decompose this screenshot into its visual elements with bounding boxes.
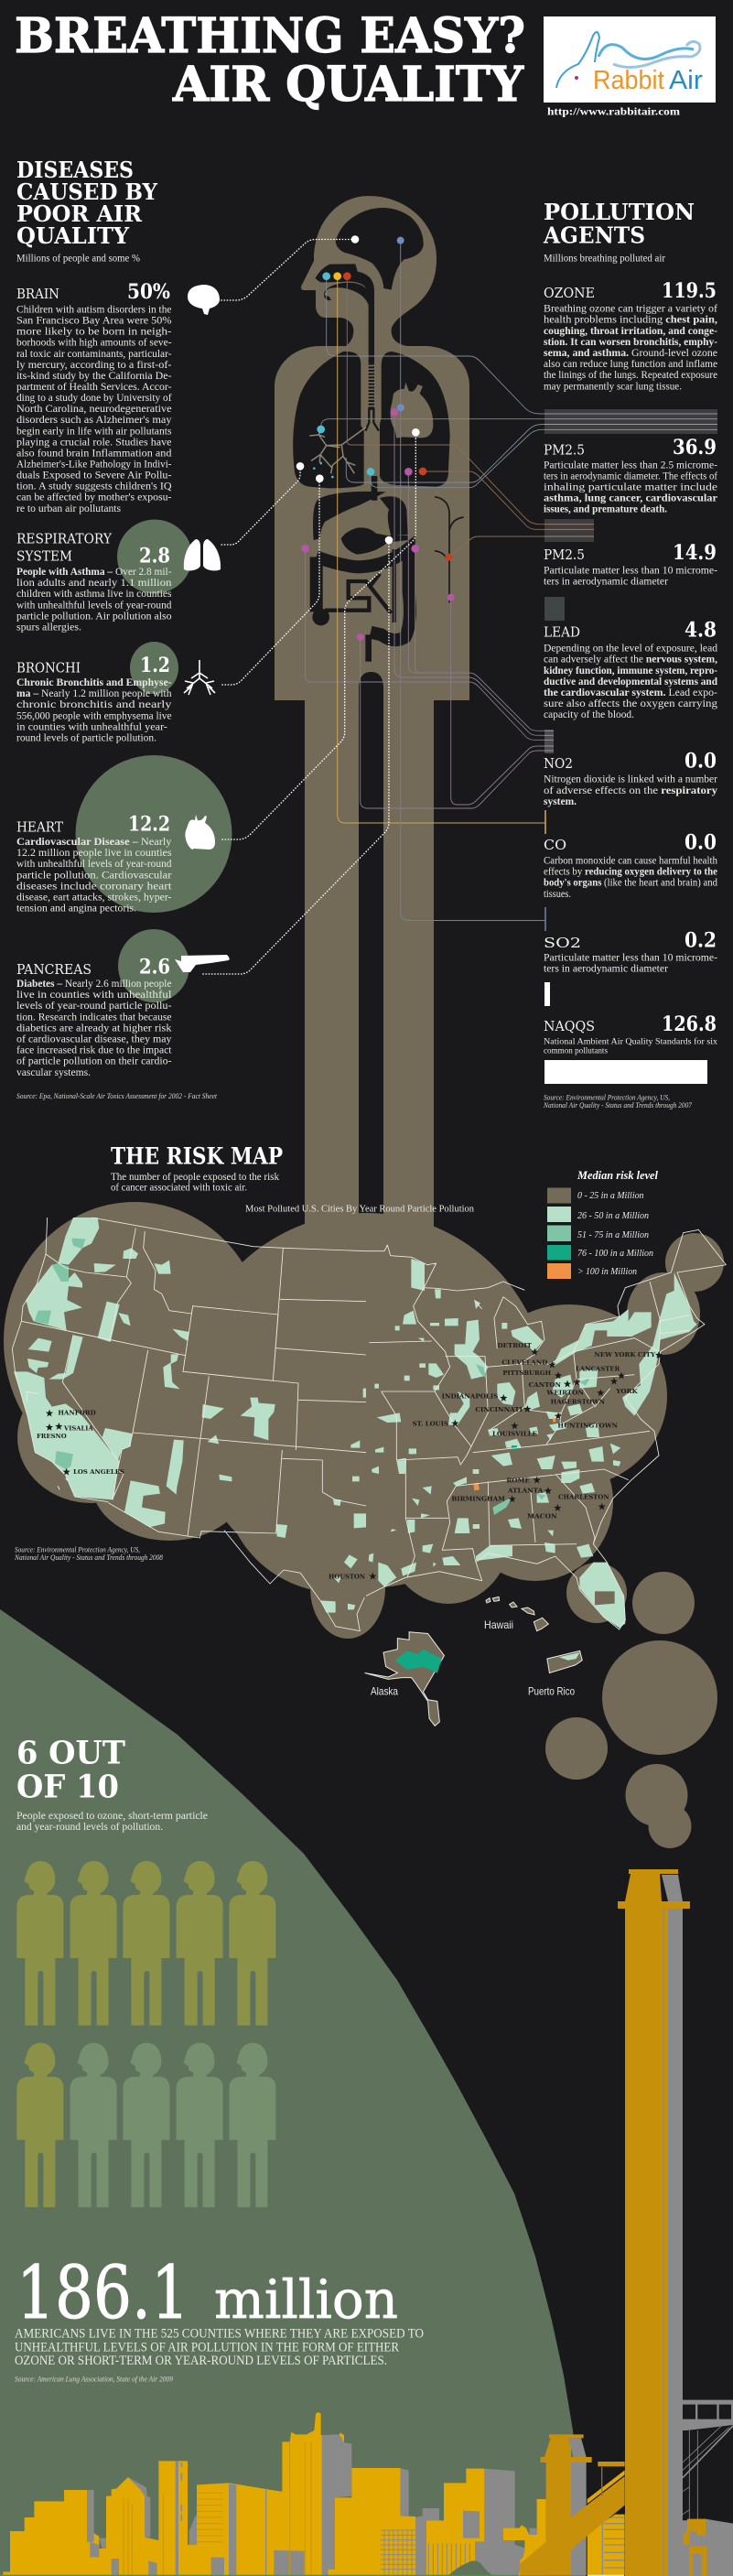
pancreas and duodenum xyxy=(341,527,408,555)
big number: 186.1 million xyxy=(16,2250,398,2335)
text: SO2: ters in aerodynamic diameter xyxy=(544,964,668,975)
text: brain: borhoods with high amounts of seve- xyxy=(16,338,172,349)
label: PM2.5 fine: PM2.5 xyxy=(544,443,585,459)
subheading: diseases: Millions of people and some % xyxy=(16,253,140,264)
panel: PM2.5 fine xyxy=(544,436,717,542)
map: eastern counties and state lines xyxy=(366,1229,726,1629)
text: brain: North Carolina, neurodegenerative xyxy=(16,404,172,415)
green dome background xyxy=(0,1609,586,2576)
legend: median risk level: Median risk level xyxy=(577,1169,659,1182)
text: pancreas: levels of year-round particle pollu- xyxy=(16,1001,172,1012)
text: bronchi: chronic bronchitis and nearly xyxy=(16,699,172,710)
title xyxy=(15,8,525,113)
text: pancreas: face increased risk due to the impact xyxy=(16,1045,172,1056)
large intestine xyxy=(317,548,410,640)
label: respiratory xyxy=(16,532,112,565)
text: ozone xyxy=(544,304,717,392)
map: city labels and stars: LANCASTER xyxy=(576,1366,620,1373)
map: city labels and stars: YORK xyxy=(615,1388,638,1395)
panel: SO2 xyxy=(544,928,717,1006)
stomach xyxy=(380,496,408,536)
icon: lungs xyxy=(184,539,221,570)
value: CO: 0.0 xyxy=(684,831,717,855)
text: NAQQS xyxy=(544,1036,717,1055)
map: city labels and stars: FRESNO xyxy=(37,1433,67,1440)
text: SO2 xyxy=(544,953,717,975)
heart xyxy=(390,383,433,438)
text: bronchi: in counties with unhealthful year- xyxy=(16,721,167,732)
logo: Rabbit Air: Air xyxy=(669,66,703,95)
windpipe xyxy=(362,363,380,409)
map: city labels and stars: HUNTINGTOWN xyxy=(557,1422,618,1429)
text: lead xyxy=(544,644,718,720)
text: brain: duals Exposed to Severe Air Pollu- xyxy=(16,471,172,482)
value: NO2: 0.0 xyxy=(684,749,717,773)
text: CO xyxy=(544,855,717,900)
text: brain: re to urban air pollutants xyxy=(16,503,122,514)
text: pancreas: diabetics are already at higher risk xyxy=(16,1023,172,1034)
source: risk map: Source: Environmental Protection Agency, US, xyxy=(15,1546,140,1554)
text: pancreas: vascular systems. xyxy=(16,1067,91,1078)
value: brain: 50% xyxy=(127,280,170,304)
text: pancreas: Diabetes – Nearly 2.6 million people xyxy=(16,979,172,990)
text: brain: San Francisco Bay Area were 50% xyxy=(16,315,172,326)
text: heart: tension and angina pectoris. xyxy=(16,904,136,915)
text: pancreas: of cardiovascular disease, they may xyxy=(16,1034,172,1045)
brain cavity xyxy=(336,208,424,290)
heading: risk map: THE RISK MAP xyxy=(111,1142,283,1170)
website url: http://www.rabbitair.com xyxy=(547,104,680,117)
nasal cavity and throat xyxy=(315,264,374,363)
text: respiratory: spurs allergies. xyxy=(16,622,81,633)
value: lead: 4.8 xyxy=(684,619,717,643)
source: pollution agents: Source: Environmental Protection Agency, US, xyxy=(544,1093,670,1102)
text: bronchi: Chronic Bronchitis and Emphyse- xyxy=(16,677,172,688)
dot: respiratory xyxy=(296,462,304,471)
text: bronchi: 556,000 people with emphysema live xyxy=(16,710,172,721)
smoke clouds xyxy=(545,1640,717,1848)
text: PM2.5 fine: inhaling particulate matter include xyxy=(544,482,717,492)
text: lead: sure also affects the oxygen carrying xyxy=(544,698,717,709)
map: city labels and stars: CLEVELAND xyxy=(501,1358,548,1366)
text: respiratory: children with asthma live in counties xyxy=(16,589,172,600)
dot: heart xyxy=(412,428,420,437)
text: NAQQS: common pollutants xyxy=(544,1046,608,1055)
heading: diseases: CAUSED BY xyxy=(16,179,158,205)
connector lines: nitrogen dioxide xyxy=(306,412,554,808)
text: respiratory: lion adults and nearly 1.1 million xyxy=(16,578,172,589)
bubble: respiratory xyxy=(117,520,192,593)
icon: heart xyxy=(185,815,215,850)
map: city labels and stars: CANTON xyxy=(529,1381,561,1389)
dotted connector: brain xyxy=(221,240,355,300)
text: ozone: coughing, throat irritation, and conge- xyxy=(544,326,717,337)
source: risk map xyxy=(14,1546,163,1562)
text: lead: ductive and developmental systems and xyxy=(544,676,718,687)
heading: diseases: DISEASES xyxy=(16,157,134,183)
dot: bronchi xyxy=(316,474,324,482)
text: ozone: health problems including chest pain, xyxy=(544,315,717,326)
dotted connector: respiratory xyxy=(221,466,300,545)
text: ozone: Breathing ozone can trigger a variety of xyxy=(544,304,717,315)
city skyline east xyxy=(366,2434,625,2575)
text: heart: Cardiovascular Disease – Nearly xyxy=(16,837,172,848)
dotted connector: bronchi xyxy=(221,479,319,685)
text: CO: effects by reducing oxygen delivery to the xyxy=(544,867,717,878)
map: city labels and stars: WEIRTON xyxy=(545,1390,584,1397)
bubble: pancreas xyxy=(118,929,189,1002)
icon: bronchi xyxy=(184,660,215,695)
text: ozone: also can reduce lung function and inflame xyxy=(544,359,717,370)
bronchial tree xyxy=(309,428,366,473)
small intestine xyxy=(325,549,394,622)
text: americans: AMERICANS LIVE IN THE 525 COUNTIES WHERE THEY ARE EXPOSED TO xyxy=(15,2327,424,2342)
caption: most polluted cities: Most Polluted U.S. Cities By Year Round Particle Pollution xyxy=(245,1204,474,1215)
text: lead: the cardiovascular system. Lead expo- xyxy=(544,687,717,698)
Hawaii label: Hawaii xyxy=(484,1618,513,1631)
value: SO2: 0.2 xyxy=(684,928,717,952)
dot: brain xyxy=(351,235,359,244)
map: city labels and stars: INDIANAPOLIS xyxy=(442,1392,499,1400)
text: risk map intro: of cancer associated with toxic air. xyxy=(111,1183,247,1194)
value: heart: 12.2 xyxy=(128,813,170,837)
text: respiratory: People with Asthma – Over 2.8 mil- xyxy=(16,567,172,578)
panel: risk map blobs xyxy=(4,1202,724,1639)
value: NAQQS: 126.8 xyxy=(662,1012,717,1036)
map: city labels and stars: HOUSTON xyxy=(329,1573,365,1580)
text: brain: more likely to be born in neigh- xyxy=(16,327,172,338)
text: risk map intro xyxy=(111,1172,279,1194)
panel: NAQQS xyxy=(544,1012,717,1084)
panel: respiratory system xyxy=(16,462,304,633)
text: ozone: may permanently scar lung tissue. xyxy=(544,381,682,392)
text: lead: can adversely affect the nervous system, xyxy=(544,655,717,666)
text: lead: Depending on the level of exposure, lead xyxy=(544,644,717,655)
panel: NO2 xyxy=(544,749,717,807)
text: pancreas: tion. Research indicates that because xyxy=(16,1012,171,1023)
text: americans xyxy=(15,2327,424,2368)
heading: 6 out of 10 xyxy=(16,1735,125,1805)
label: PM2.5 coarse: PM2.5 xyxy=(544,547,585,563)
heading: diseases: QUALITY xyxy=(16,222,130,249)
text: 6 out of 10: and year-round levels of pollution. xyxy=(16,1822,163,1833)
map: city labels and stars: LOUISVILLE xyxy=(492,1431,537,1438)
pictogram: people row 1 xyxy=(16,1861,275,2025)
label: NAQQS: NAQQS xyxy=(544,1019,595,1034)
label: lead: LEAD xyxy=(544,625,580,641)
panel: brain xyxy=(16,235,359,514)
text: brain: ral toxic air contaminants, particular- xyxy=(16,349,172,360)
value: PM2.5 fine: 36.9 xyxy=(673,436,717,460)
esophagus stub xyxy=(372,476,377,501)
connector lines: ozone xyxy=(321,276,717,488)
value: PM2.5 coarse: 14.9 xyxy=(673,541,717,565)
text: PM2.5 coarse xyxy=(544,566,717,588)
map: city labels and stars: PITTSBURGH xyxy=(502,1369,551,1377)
panel: lead xyxy=(544,619,718,753)
subheading: pollution agents: Millions breathing polluted air xyxy=(544,253,665,264)
panel: bronchi xyxy=(16,474,324,743)
text: pancreas: live in counties with unhealthful xyxy=(16,990,172,1001)
map: city labels and stars: VISALIA xyxy=(63,1424,94,1432)
heading: 6 out of 10: OF 10 xyxy=(16,1769,119,1805)
bar: PM2.5 fine xyxy=(544,519,594,542)
text: brain: Alzheimer's-Like Pathology in Indivi- xyxy=(16,460,172,471)
text: bronchi xyxy=(16,677,172,743)
legend: median risk level: 26 - 50 in a Million xyxy=(577,1210,649,1221)
Puerto Rico map xyxy=(547,1651,582,1672)
map: city labels and stars: HAGERSTOWN xyxy=(551,1399,605,1406)
text: brain: begin early in life with air pollutants xyxy=(16,426,172,437)
bar: NAQQS xyxy=(544,1060,707,1084)
panel: PM2.5 coarse xyxy=(544,541,717,621)
panel: CO xyxy=(544,831,717,900)
source: risk map: National Air Quality - Status and Trends through 2008 xyxy=(14,1553,163,1562)
icon: pancreas xyxy=(175,955,230,972)
dot: pancreas xyxy=(385,536,393,544)
Alaska label: Alaska xyxy=(371,1684,398,1697)
map: city labels and stars xyxy=(37,1342,663,1580)
heading: pollution agents xyxy=(543,199,695,249)
text: PM2.5 fine: asthma, lung cancer, cardiovascular xyxy=(544,493,717,504)
text: heart xyxy=(16,837,172,915)
label: NO2: NO2 xyxy=(544,756,573,772)
map: city labels and stars: ST. LOUIS xyxy=(413,1420,448,1427)
legend: median risk level: 76 - 100 in a Million xyxy=(577,1248,653,1259)
connector lines: particulates xyxy=(347,276,594,557)
leg gap xyxy=(359,672,383,1217)
text: heart: diseases include coronary heart xyxy=(16,881,172,892)
text: respiratory: particle pollution. Air pollution also xyxy=(16,611,172,622)
text: brain: its-kind study by the California De- xyxy=(16,371,172,382)
ground strip xyxy=(0,2575,624,2576)
text: NAQQS: National Ambient Air Quality Standards for six xyxy=(544,1036,717,1047)
right lung xyxy=(380,352,450,487)
text: CO: body's organs (like the heart and brain) and xyxy=(544,878,717,889)
text: risk map intro: The number of people exposed to the risk xyxy=(111,1172,279,1183)
map: western counties and state lines xyxy=(12,1218,366,1631)
text: bronchi: round levels of particle pollution. xyxy=(16,732,156,743)
icon: brain xyxy=(188,285,220,315)
big number: 186.1 million: 186.1 xyxy=(16,2250,189,2335)
text: brain: Children with autism disorders in the xyxy=(16,304,172,315)
heading: diseases xyxy=(16,157,158,249)
Alaska map xyxy=(365,1632,444,1726)
map: city labels and stars: DETROIT xyxy=(497,1342,532,1349)
left lung xyxy=(293,352,364,488)
dotted connector: pancreas xyxy=(201,540,389,974)
source: pollution agents: National Air Quality - Status and Trends through 2007 xyxy=(543,1101,693,1109)
text: PM2.5 fine: Particulate matter less than 2.5 microme- xyxy=(544,460,717,471)
text: heart: particle pollution. Cardiovascular xyxy=(16,870,172,881)
heading: 6 out of 10: 6 OUT xyxy=(16,1735,125,1772)
text: PM2.5 coarse: Particulate matter less than 10 microme- xyxy=(544,566,717,577)
text: americans: UNHEALTHFUL LEVELS OF AIR POLLUTION IN THE FORM OF EITHER xyxy=(15,2340,399,2354)
text: CO: tissues. xyxy=(544,889,571,900)
label: pancreas: PANCREAS xyxy=(16,962,92,978)
text: PM2.5 fine: issues, and premature death. xyxy=(544,504,667,515)
text: brain: disorders such as Alzheimer's may xyxy=(16,415,172,426)
label: CO: CO xyxy=(544,838,566,853)
label: SO2: SO2 xyxy=(544,936,581,951)
text: CO: Carbon monoxide can cause harmful health xyxy=(544,855,717,866)
panel: ozone xyxy=(544,279,717,434)
panel: pancreas xyxy=(16,536,393,1078)
text: NO2: Nitrogen dioxide is linked with a number xyxy=(544,774,717,785)
text: ozone: sema, and asthma. Ground-level ozone xyxy=(544,348,717,359)
text: brain: ly mercury, according to a first-of- xyxy=(16,360,172,371)
map: city labels and stars: CHARLESTON xyxy=(558,1494,609,1501)
source: diseases: Source: Epa, National-Scale Air Toxics Assessment for 2002 - Fact Sheet xyxy=(16,1092,218,1100)
text: PM2.5 fine: ters in aerodynamic diameter. The effects of xyxy=(544,471,717,482)
map: city labels and stars: MACON xyxy=(527,1513,557,1521)
Hawaii islands xyxy=(486,1596,548,1631)
map: city labels and stars: NEW YORK CITY xyxy=(594,1351,655,1358)
big number: 186.1 million: million xyxy=(214,2268,398,2331)
source: american lung association: Source: American Lung Association, State of the Air 2009 xyxy=(15,2376,173,2384)
text: respiratory: with unhealthful levels of year-round xyxy=(16,600,172,611)
bar: PM2.5 coarse xyxy=(544,597,565,621)
connector line: carbon monoxide xyxy=(338,276,545,834)
label: respiratory: RESPIRATORY xyxy=(16,532,112,547)
Puerto Rico label: Puerto Rico xyxy=(528,1684,575,1697)
logo: Rabbit Air: Rabbit xyxy=(593,66,664,95)
industrial structure right xyxy=(683,2400,733,2576)
bubble: bronchi xyxy=(130,642,178,694)
heading: pollution agents: AGENTS xyxy=(543,222,645,249)
text: heart: disease, eart attacks, strokes, hyper- xyxy=(16,892,172,903)
panel: heart xyxy=(16,428,420,915)
text: brain: tion. A study suggests children's IQ xyxy=(16,482,172,492)
city skyline xyxy=(3,2412,369,2575)
legend: median risk level: 51 - 75 in a Million xyxy=(577,1229,649,1240)
liver xyxy=(313,492,386,540)
legend: median risk level: > 100 in Million xyxy=(577,1266,637,1277)
text: 6 out of 10: People exposed to ozone, short-term particle xyxy=(16,1811,208,1822)
text: heart: 12.2 million people live in counties xyxy=(16,848,172,859)
logo: Rabbit Air xyxy=(544,16,716,103)
bar: SO2 xyxy=(544,982,550,1006)
dotted connector: heart xyxy=(221,432,415,839)
human body silhouette xyxy=(275,196,469,1231)
value: pancreas: 2.6 xyxy=(139,956,170,980)
bar: ozone xyxy=(544,409,717,434)
value: bronchi: 1.2 xyxy=(140,654,170,677)
text: ozone: the linings of the lungs. Repeated exposure xyxy=(544,370,717,381)
connector line: sulfur dioxide xyxy=(401,241,545,931)
map: city labels and stars: LOS ANGELES xyxy=(73,1468,124,1476)
text: NO2: system. xyxy=(544,796,577,807)
map: city labels and stars: CINCINNATI xyxy=(475,1406,523,1413)
title: AIR QUALITY xyxy=(172,57,524,113)
value: respiratory: 2.8 xyxy=(139,545,170,568)
label: respiratory: SYSTEM xyxy=(16,549,72,565)
text: PM2.5 coarse: ters in aerodynamic diameter xyxy=(544,577,668,588)
label: brain: BRAIN xyxy=(16,287,59,302)
text: ozone: stion. It can worsen bronchitis, emphy- xyxy=(544,337,717,348)
text: lead: capacity of the blood. xyxy=(544,709,634,720)
text: brain: playing a crucial role. Studies have xyxy=(16,437,172,448)
title: BREATHING EASY? xyxy=(15,8,525,64)
text: bronchi: ma – Nearly 1.2 million people with xyxy=(16,688,172,699)
bush xyxy=(448,2560,492,2575)
text: 6 out of 10 xyxy=(16,1811,208,1833)
text: brain: partment of Health Services. Accor- xyxy=(16,382,172,393)
text: PM2.5 fine xyxy=(544,460,717,515)
source: pollution agents xyxy=(543,1093,693,1109)
text: pancreas: of particle pollution on their cardio- xyxy=(16,1056,172,1067)
pictogram: people row 2 xyxy=(16,2043,275,2207)
text: heart: with unhealthful levels of year-round xyxy=(16,859,172,870)
text: brain: ding to a study done by University of xyxy=(16,393,172,404)
vessel xyxy=(435,497,464,602)
text: pancreas xyxy=(16,979,172,1078)
text: brain: can be affected by mother's exposu- xyxy=(16,492,172,503)
text: brain: also found brain Inflammation and xyxy=(16,448,172,459)
text: brain xyxy=(16,304,172,514)
text: americans: OZONE OR SHORT-TERM OR YEAR-ROUND LEVELS OF PARTICLES. xyxy=(15,2354,387,2368)
legend: median risk level: 0 - 25 in a Million xyxy=(577,1190,644,1201)
map: city labels and stars: ROME xyxy=(506,1477,530,1484)
text: lead: kidney function, immune system, repro- xyxy=(544,666,717,676)
text: NO2: of adverse effects on the respiratory xyxy=(544,785,717,796)
text: NO2 xyxy=(544,774,717,807)
label: heart: HEART xyxy=(16,820,63,836)
map: city labels and stars: HANFORD xyxy=(58,1410,96,1417)
heading: pollution agents: POLLUTION xyxy=(544,199,695,225)
secondary chimney xyxy=(520,2434,625,2575)
heading: diseases: POOR AIR xyxy=(16,200,143,227)
main smokestack xyxy=(618,1869,690,2576)
bubble: heart xyxy=(75,755,232,913)
legend: median risk level xyxy=(547,1169,659,1279)
label: bronchi: BRONCHI xyxy=(16,661,81,676)
bar: lead xyxy=(544,730,554,753)
text: respiratory xyxy=(16,567,172,633)
map: city labels and stars: BIRMINGHAM xyxy=(451,1496,506,1503)
map: city labels and stars: ATLANTA xyxy=(507,1488,544,1495)
value: ozone: 119.5 xyxy=(662,279,717,303)
text: SO2: Particulate matter less than 10 microme- xyxy=(544,953,717,964)
label: ozone: OZONE xyxy=(544,286,595,301)
body dots xyxy=(301,237,455,641)
